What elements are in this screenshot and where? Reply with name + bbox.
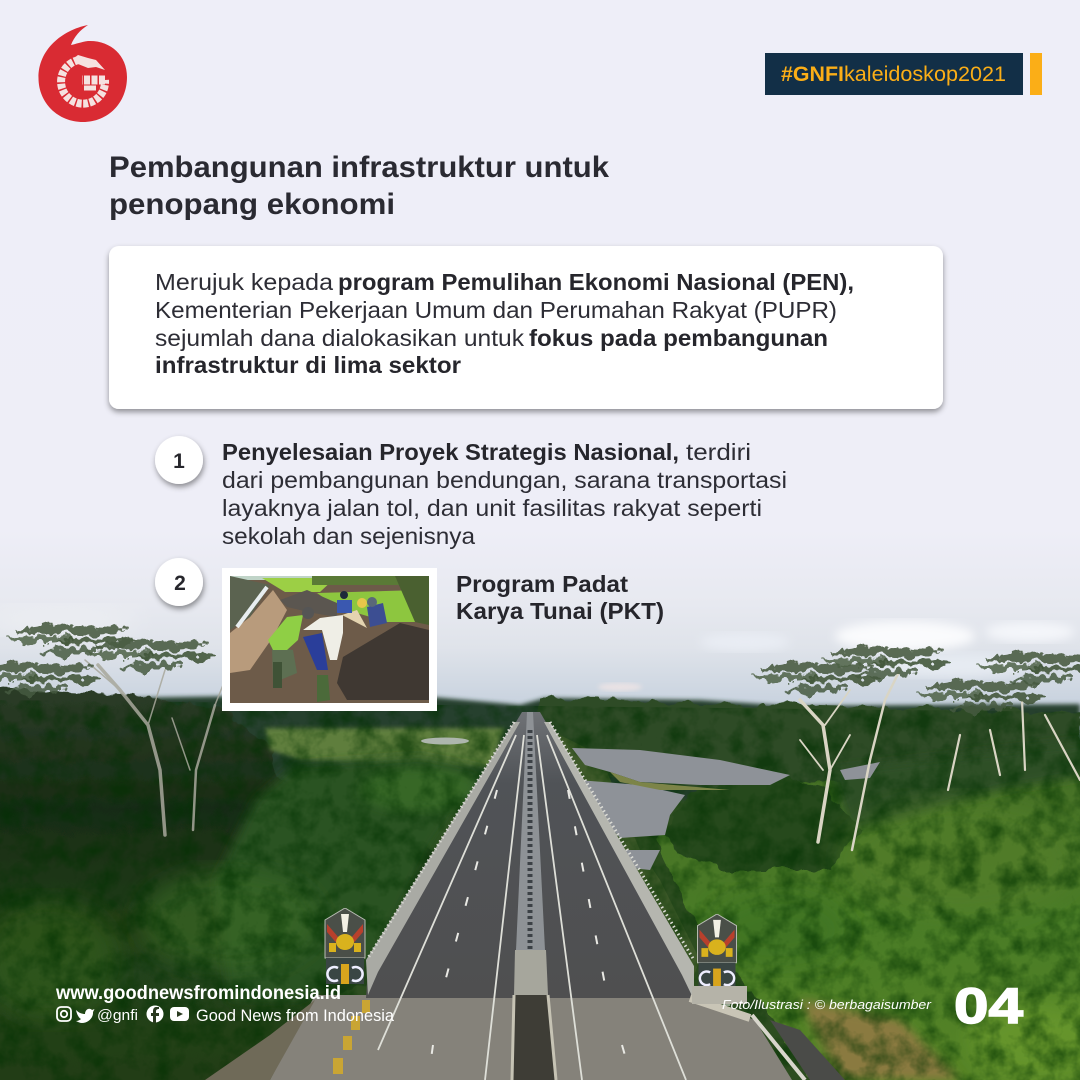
- item 1 text: terdiri: [686, 439, 751, 465]
- panel: intro card: infrastruktur di lima sektor: [155, 352, 461, 378]
- hashtag banner: #GNFI: [781, 63, 844, 86]
- photo: highway landscape: [0, 622, 1080, 1080]
- bottom left foliage highlight: [0, 900, 120, 1020]
- distant hills: [0, 696, 1080, 800]
- right trees: [800, 670, 1080, 850]
- footer website: www.goodnewsfromindonesia.id: [55, 983, 341, 1004]
- number badge 1: 1: [173, 450, 185, 473]
- page number: 04: [954, 978, 1023, 1034]
- item 2 text: [456, 571, 664, 624]
- item 1 text: [222, 439, 787, 549]
- hashtag banner: kaleidoskop2021: [844, 63, 1006, 86]
- strip by the road right: [550, 730, 700, 985]
- lower approach road: [270, 995, 792, 1080]
- photo frame: workers: [222, 568, 437, 711]
- item 1 text: sekolah dan sejenisnya: [222, 523, 475, 549]
- item 1 text: Penyelesaian Proyek Strategis Nasional,: [222, 439, 679, 465]
- hashtag banner: [765, 53, 1023, 95]
- logo white emblem: [61, 55, 105, 104]
- upper bridge deck: [366, 712, 692, 998]
- worker green: [272, 648, 297, 679]
- title: [109, 151, 609, 221]
- green marsh field: [265, 728, 505, 768]
- right barrier: [544, 722, 694, 1000]
- item 1 text: dari pembangunan bendungan, sarana transportasi: [222, 467, 787, 493]
- clouds: [0, 606, 1075, 691]
- social icon: twitter: [76, 1009, 94, 1023]
- panel: intro card: program Pemulihan Ekonomi Nasional (PEN),: [338, 269, 854, 295]
- banner accent: [1030, 53, 1042, 95]
- median: [516, 712, 545, 950]
- panel: intro card: Merujuk kepada: [155, 269, 333, 295]
- bottom right dirt: [800, 1000, 960, 1080]
- logo red swoosh: [38, 25, 127, 122]
- panel: intro card: Kementerian Pekerjaan Umum dan Perumahan Rakyat (PUPR): [155, 297, 837, 323]
- left traffic posts: [333, 1000, 370, 1074]
- worker white: [303, 633, 328, 670]
- logo: [38, 25, 127, 122]
- title: penopang ekonomi: [109, 188, 395, 221]
- lake: [572, 748, 880, 870]
- title: Pembangunan infrastruktur untuk: [109, 151, 609, 184]
- panel: intro card: sejumlah dana dialokasikan untuk: [155, 325, 525, 351]
- social icon: youtube: [170, 1007, 189, 1021]
- number badge 2: [155, 558, 203, 606]
- panel: intro card: [109, 246, 943, 409]
- dirt slope left: [205, 1000, 315, 1080]
- social handle: @gnfi: [97, 1007, 138, 1024]
- number badge 2: 2: [174, 572, 186, 595]
- item 1 text: layaknya jalan tol, dan unit fasilitas rakyat seperti: [222, 495, 762, 521]
- item 2 text: Program Padat: [456, 571, 628, 597]
- marsh pond: [421, 738, 469, 744]
- lane lines: [378, 735, 686, 1080]
- sign monuments: [325, 908, 365, 984]
- number badge 1: [155, 436, 203, 484]
- panel: intro card: fokus pada pembangunan: [529, 325, 828, 351]
- land base: [0, 780, 1080, 1080]
- right near foliage: [655, 760, 1080, 1080]
- right distant forest: [540, 698, 1080, 830]
- social icon: facebook: [146, 1006, 164, 1023]
- social page name: Good News from Indonesia: [196, 1006, 395, 1025]
- bushes below the field: [215, 756, 490, 1000]
- left barrier: [366, 722, 520, 995]
- left trees: [85, 660, 225, 835]
- foliage texture: [0, 700, 1080, 1080]
- right approach rail: [690, 998, 750, 1018]
- item 2 text: Karya Tunai (PKT): [456, 598, 664, 624]
- workers back: [337, 600, 352, 613]
- social icon: instagram: [57, 1007, 71, 1021]
- left forest mass: [0, 688, 470, 1080]
- photo credit: Foto/Ilustrasi : © berbagaisumber: [722, 997, 932, 1012]
